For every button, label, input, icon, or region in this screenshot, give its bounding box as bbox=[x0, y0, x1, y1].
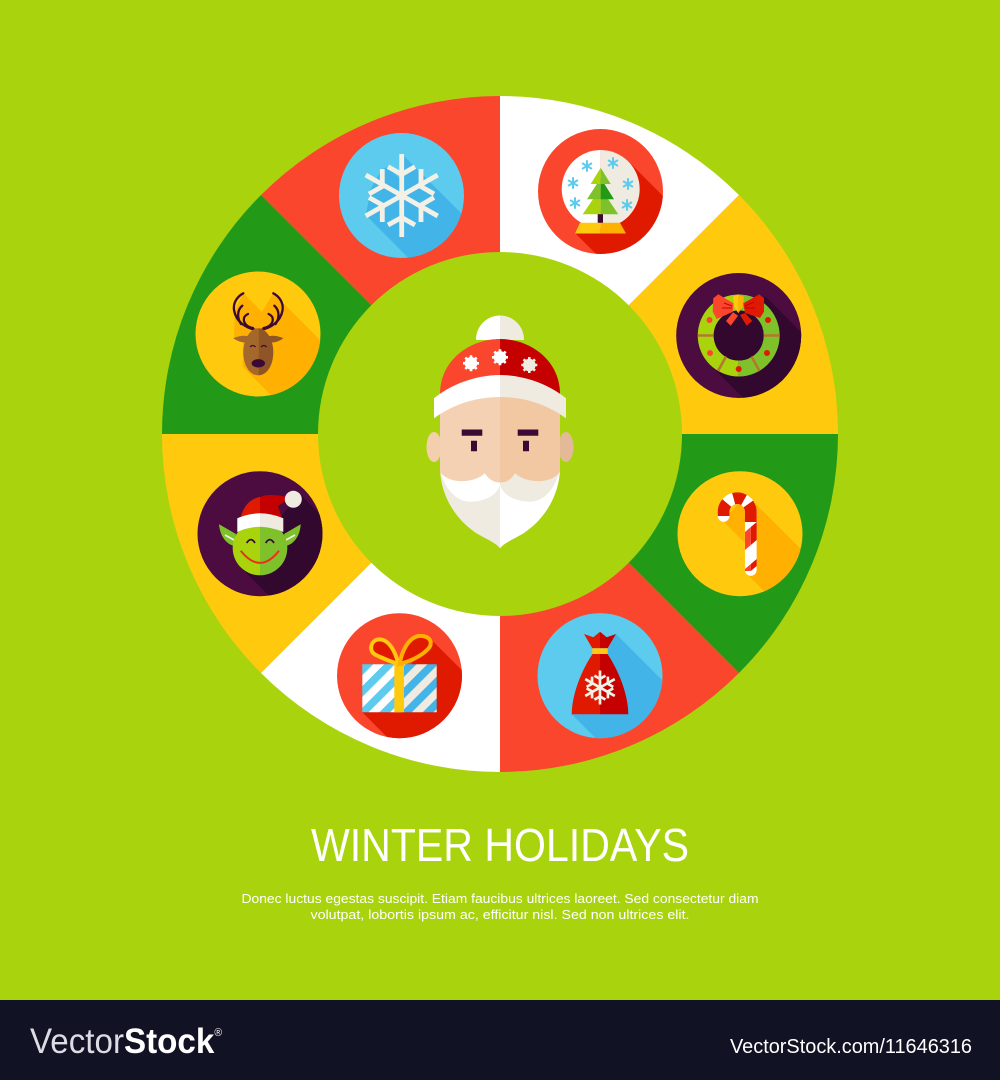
segment: cane green bbox=[629, 434, 838, 673]
bow bbox=[726, 312, 738, 326]
ears bbox=[233, 336, 251, 343]
ring chart bbox=[162, 96, 838, 772]
description bbox=[242, 891, 758, 922]
icon: snowflake bbox=[339, 133, 464, 258]
description: Donec luctus egestas suscipit. Etiam faucibus ultrices laoreet. Sed consectetur diam bbox=[242, 891, 758, 906]
footer bar bbox=[0, 1000, 1000, 1080]
ears bbox=[426, 432, 442, 462]
icon: santa face bbox=[426, 316, 574, 548]
beard bbox=[440, 470, 500, 548]
segment: globe white bbox=[500, 96, 739, 305]
icon: elf bbox=[198, 471, 322, 596]
ears bbox=[219, 524, 236, 546]
icon: candy cane bbox=[678, 471, 802, 596]
segment: wreath yellow bbox=[629, 195, 838, 434]
image id: VectorStock.com/11646316 bbox=[730, 1036, 972, 1058]
title: WINTER HOLIDAYS bbox=[311, 819, 689, 871]
icon: gift bbox=[337, 613, 462, 738]
tree bbox=[598, 214, 603, 223]
mustache bbox=[440, 470, 500, 502]
face bbox=[440, 395, 500, 482]
segment: bag red bbox=[500, 563, 739, 772]
icon: snow globe bbox=[538, 129, 663, 254]
segment: elf yellow bbox=[162, 434, 371, 673]
snow dots bbox=[569, 158, 632, 210]
brows and eyes bbox=[462, 430, 538, 451]
segment: gift white bbox=[261, 563, 500, 772]
segment: deer green bbox=[162, 195, 371, 434]
description: volutpat, lobortis ipsum ac, efficitur nisl. Sed non ultrices elit. bbox=[310, 907, 690, 922]
icon: santa sack bbox=[538, 613, 662, 738]
segment: snow red bbox=[261, 96, 500, 305]
hat bbox=[440, 339, 500, 394]
head bbox=[233, 521, 260, 575]
icon: wreath bbox=[676, 273, 802, 398]
logo: ® bbox=[214, 1027, 222, 1039]
logo: VectorStock bbox=[30, 1022, 219, 1061]
hat cuff bbox=[434, 375, 500, 418]
pompom bbox=[476, 316, 500, 340]
head bbox=[243, 328, 258, 375]
hat bbox=[240, 497, 260, 519]
icon: reindeer bbox=[196, 272, 320, 396]
hat snowflakes bbox=[463, 349, 537, 373]
